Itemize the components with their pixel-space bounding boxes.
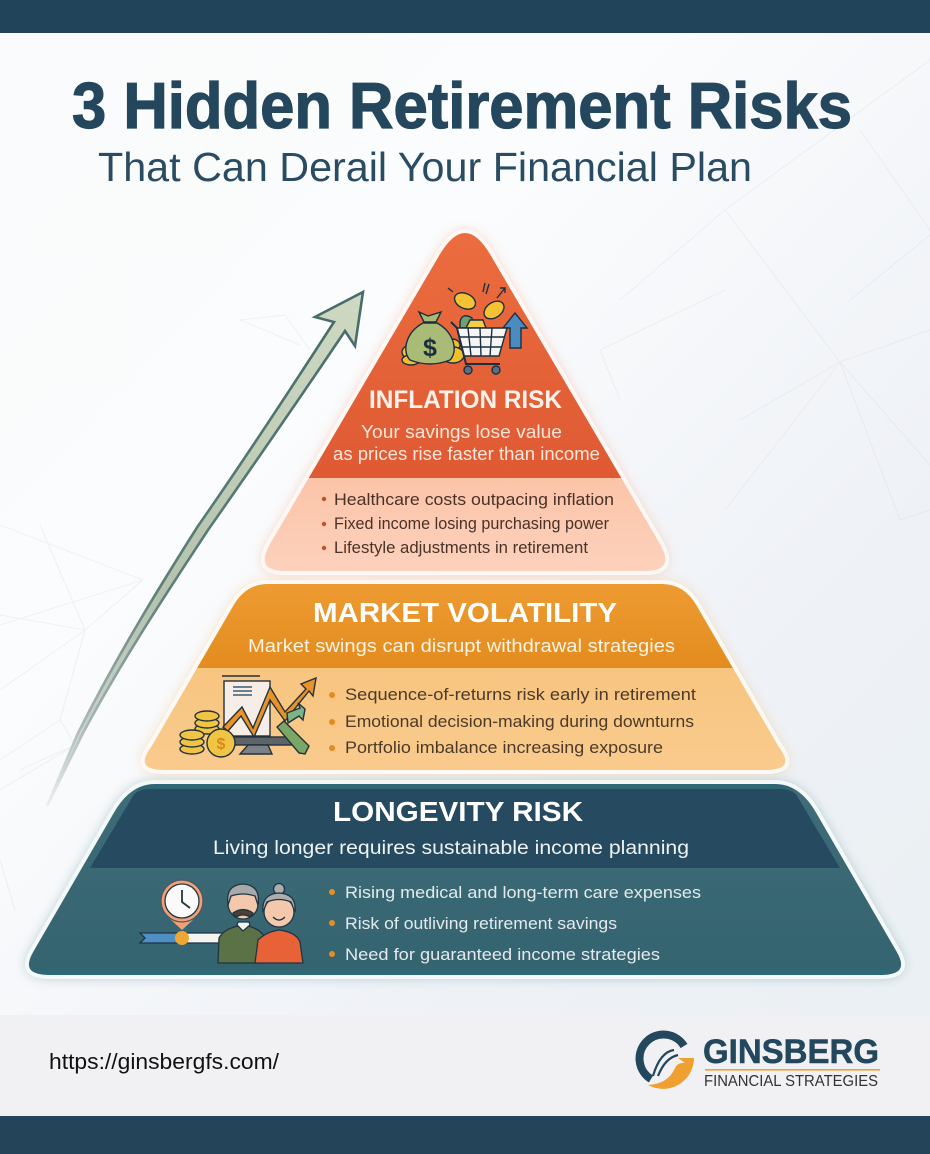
text: longevity subtitle: Living longer requires sustainable income planning [213,838,689,859]
list: inflation bullets: Lifestyle adjustments in retirement [334,539,588,557]
footer [0,1015,930,1116]
list: inflation bullets [322,491,614,557]
icon: clock, timeline and retired couple [140,880,303,963]
icon: money bag, cart and coins: $ [423,334,437,362]
subtitle: That Can Derail Your Financial Plan [98,144,752,190]
heading: market volatility: MARKET VOLATILITY [313,597,617,628]
heading: longevity risk: LONGEVITY RISK [333,796,583,827]
icon: chart, monitor and coins: $ [217,736,226,753]
panel: market volatility tier [120,578,810,778]
list: market bullets: Sequence-of-returns risk early in retirement [345,685,696,704]
title: 3 Hidden Retirement Risks [72,69,852,142]
list: market bullets [329,685,696,757]
text: inflation subtitle: Your savings lose value [361,422,562,442]
list: longevity bullets: Risk of outliving retirement savings [345,914,617,933]
top bar [0,0,930,33]
list: longevity bullets: Need for guaranteed income strategies [345,945,660,964]
text: inflation subtitle: as prices rise faster than income [333,444,600,464]
website url: https://ginsbergfs.com/ [49,1049,280,1074]
icon: chart, monitor and coins [180,676,316,757]
logo: Ginsberg Financial Strategies: FINANCIAL STRATEGIES [704,1073,878,1090]
logo: Ginsberg Financial Strategies [640,1033,880,1090]
bottom bar [0,1116,930,1154]
logo: Ginsberg Financial Strategies: GINSBERG [703,1033,879,1071]
text: inflation subtitle [333,422,600,464]
list: market bullets: Portfolio imbalance increasing exposure [345,738,663,757]
list: longevity bullets [329,883,701,964]
panel: longevity risk tier [0,770,930,985]
heading: inflation risk: INFLATION RISK [369,386,562,414]
panel: inflation risk tier [250,225,680,578]
text: market subtitle: Market swings can disrupt withdrawal strategies [248,636,675,656]
list: inflation bullets: Healthcare costs outpacing inflation [334,491,614,509]
list: inflation bullets: Fixed income losing purchasing power [334,515,609,533]
icon: money bag, cart and coins [402,283,527,374]
list: market bullets: Emotional decision-making during downturns [345,712,694,731]
growth arrow [47,292,363,806]
list: longevity bullets: Rising medical and long-term care expenses [345,883,701,902]
